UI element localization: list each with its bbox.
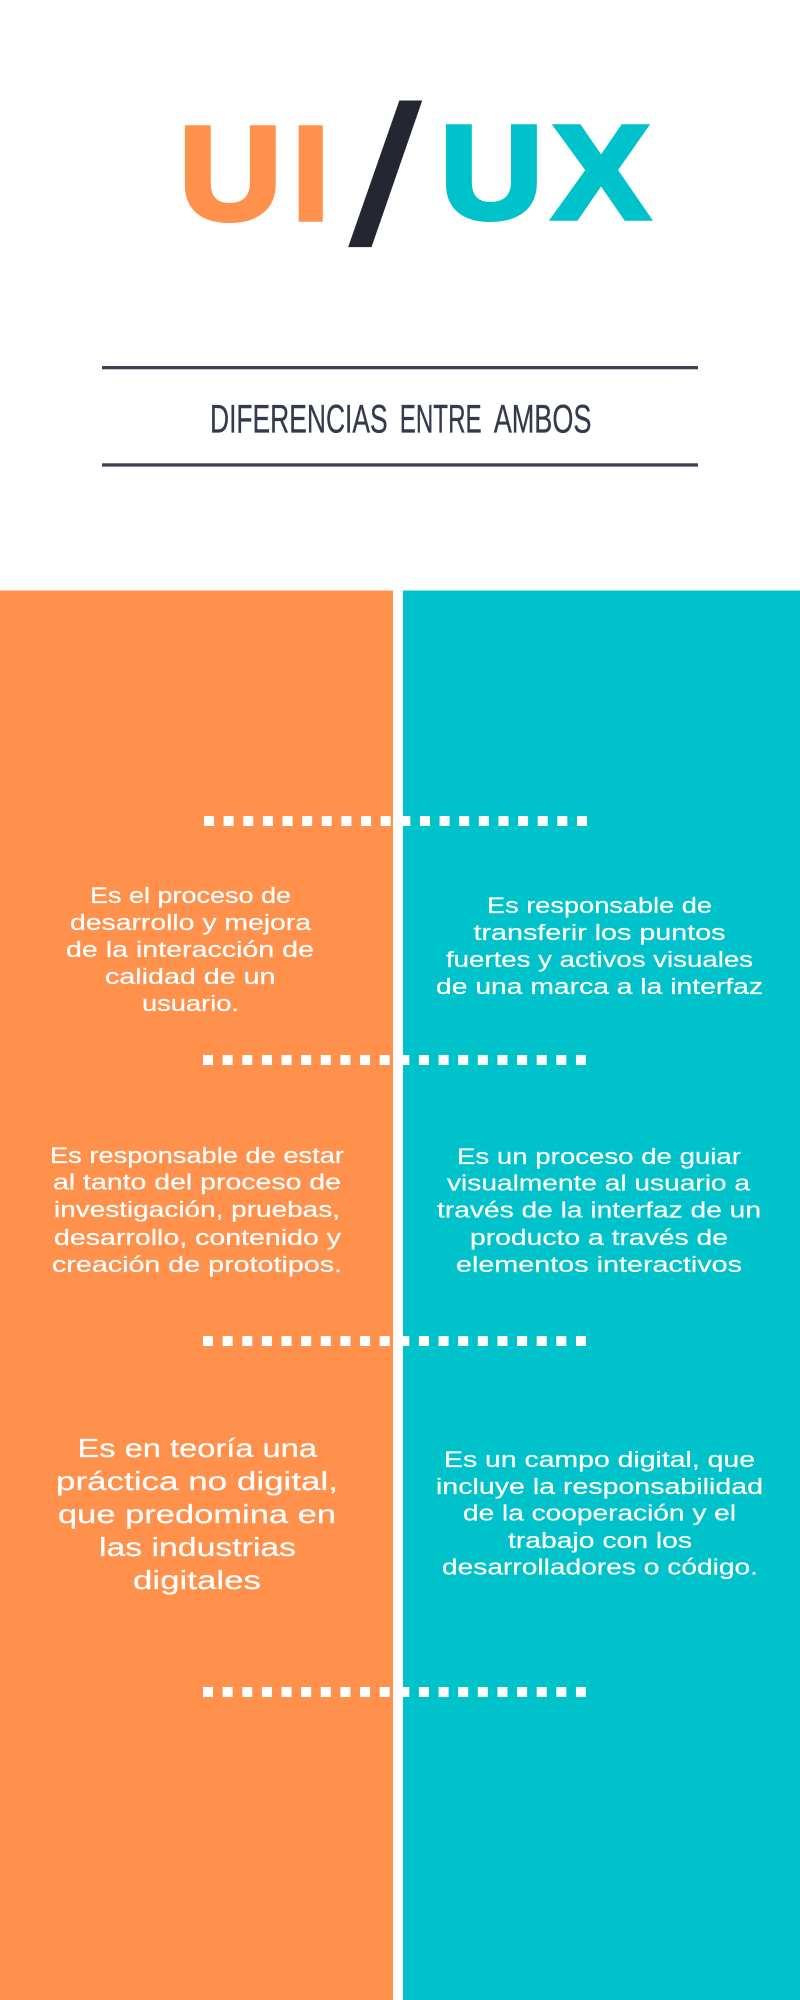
title slash: / (340, 66, 430, 286)
title word: UX (440, 98, 649, 247)
UI text 3: práctica no digital, (56, 1466, 338, 1496)
UI text 2: investigación, pruebas, (54, 1197, 340, 1222)
UX text 2: Es un proceso de guiar (457, 1144, 742, 1169)
subtitle: DIFERENCIAS (210, 398, 388, 442)
UI text 3: Es en teoría una (78, 1433, 318, 1463)
title word: UI: U (179, 99, 282, 248)
UX text 2: elementos interactivos (456, 1252, 742, 1277)
UX text 2: producto a través de (470, 1225, 728, 1250)
UX text 3: desarrolladores o código. (442, 1554, 758, 1580)
panel: UX teal column (403, 590, 800, 2000)
UI text 2: desarrollo, contenido y (54, 1225, 342, 1250)
subtitle (210, 398, 592, 442)
UI text 3: digitales (133, 1565, 261, 1595)
dotted divider 4 (203, 1687, 586, 1697)
title word: UI (179, 99, 329, 248)
title: UI / UX (179, 66, 649, 286)
UX text 2: visualmente al usuario a (447, 1171, 751, 1196)
UI text 3: las industrias (99, 1532, 296, 1562)
UX text 1: Es responsable de (487, 893, 712, 918)
UI text 1: de la interacción de (66, 937, 314, 962)
title word: UX: X (553, 99, 649, 247)
dotted divider 3 (203, 1336, 586, 1346)
UX text 1: de una marca a la interfaz (436, 974, 763, 999)
UX text 3 (436, 1447, 763, 1580)
UI text 2: Es responsable de estar (50, 1143, 345, 1168)
subtitle: ENTRE (400, 398, 482, 442)
UX text 1 (436, 893, 763, 999)
dotted divider 1 (204, 816, 587, 826)
UI text 2: creación de prototipos. (52, 1252, 342, 1277)
UX text 1: fuertes y activos visuales (446, 947, 753, 972)
UX text 3: de la cooperación y el (463, 1500, 736, 1526)
subtitle: AMBOS (494, 398, 592, 442)
UI text 2 (50, 1143, 345, 1277)
title word: UI: I (292, 100, 329, 248)
UI text 1 (66, 883, 314, 1016)
UI text 1: calidad de un (105, 964, 276, 989)
title word: UX: U (440, 98, 543, 247)
UX text 3: trabajo con los (508, 1528, 692, 1553)
UX text 1: transferir los puntos (474, 920, 726, 945)
UX text 3: Es un campo digital, que (444, 1447, 755, 1472)
UI text 3: que predomina en (58, 1499, 336, 1529)
UI text 1: desarrollo y mejora (70, 910, 312, 935)
UI text 3 (56, 1433, 338, 1595)
UX text 2: través de la interfaz de un (437, 1198, 761, 1223)
panel: UI orange column (0, 590, 393, 2000)
UI text 1: Es el proceso de (90, 883, 291, 908)
UX text 2 (437, 1144, 761, 1277)
dotted divider 2 (203, 1055, 586, 1065)
subtitle block with rules (102, 366, 698, 467)
UX text 3: incluye la responsabilidad (436, 1474, 763, 1499)
UI text 2: al tanto del proceso de (53, 1170, 341, 1194)
UI text 1: usuario. (142, 991, 239, 1016)
